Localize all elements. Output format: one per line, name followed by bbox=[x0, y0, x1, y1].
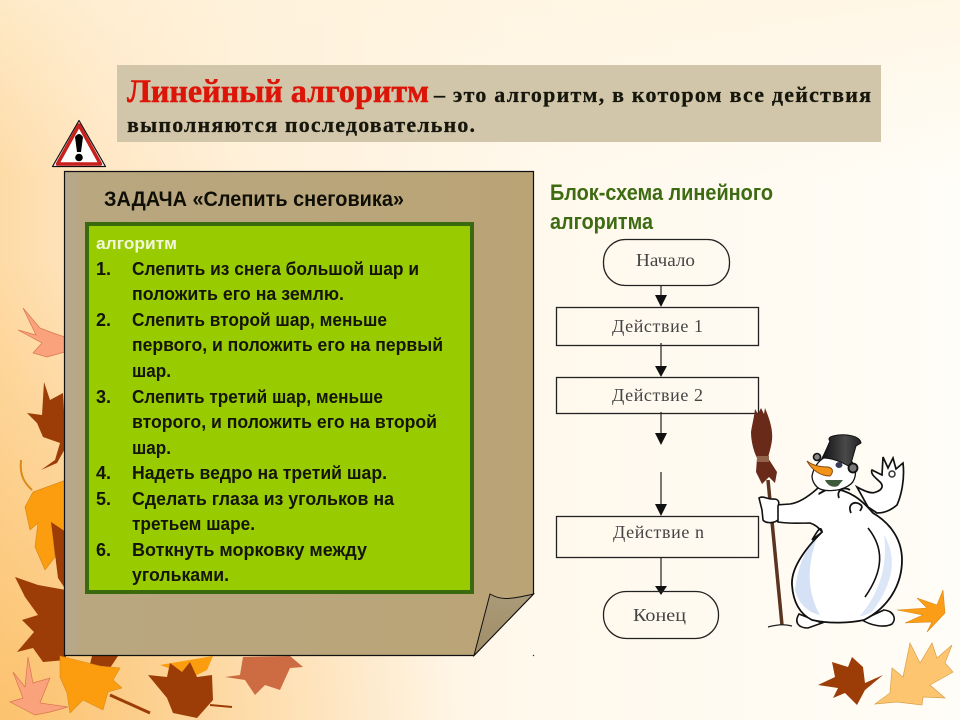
step 6: угольками. bbox=[132, 565, 229, 585]
step 1: Слепить из снега большой шар и bbox=[132, 259, 419, 279]
step 4: Надеть ведро на третий шар. bbox=[132, 463, 387, 483]
arrow: action n to end bbox=[655, 558, 667, 595]
algorithm label: алгоритм bbox=[96, 234, 177, 253]
body bbox=[792, 488, 902, 623]
step 6 bbox=[96, 540, 367, 585]
step 3 bbox=[96, 387, 437, 458]
ear bolt bbox=[848, 464, 858, 472]
flowchart heading: алгоритма bbox=[550, 209, 654, 234]
definition line two: выполняются последовательно. bbox=[127, 112, 475, 137]
illustration: snowman with broom bbox=[751, 408, 904, 628]
step 1 bbox=[96, 259, 419, 304]
step 5: третьем шаре. bbox=[132, 514, 255, 534]
feet bbox=[797, 614, 822, 628]
flowchart heading: Блок-схема линейного bbox=[550, 180, 773, 205]
step 2: первого, и положить его на первый bbox=[132, 335, 443, 355]
eye bolt bbox=[814, 454, 820, 460]
task heading: ЗАДАЧА «Слепить снеговика» bbox=[104, 188, 404, 211]
broom handle bbox=[768, 480, 782, 625]
step 1: 1. bbox=[96, 259, 111, 279]
step 2: Слепить второй шар, меньше bbox=[132, 310, 387, 330]
action 1 bbox=[556, 308, 758, 346]
step 3: шар. bbox=[132, 438, 171, 458]
left arm bbox=[776, 488, 822, 540]
end node bbox=[604, 592, 718, 638]
arrow: action 1 to action 2 bbox=[655, 343, 667, 377]
left hand bbox=[759, 497, 779, 523]
action 1: Действие 1 bbox=[612, 316, 703, 336]
flowchart bbox=[556, 240, 758, 638]
step 3: Слепить третий шар, меньше bbox=[132, 387, 383, 407]
step 6: 6. bbox=[96, 540, 111, 560]
step 5: 5. bbox=[96, 489, 111, 509]
action n: Действие n bbox=[613, 522, 704, 542]
action 2 bbox=[556, 378, 758, 414]
icon: warning triangle bbox=[52, 120, 106, 166]
eye bbox=[836, 462, 842, 468]
step 4: 4. bbox=[96, 463, 111, 483]
step 1: положить его на землю. bbox=[132, 284, 344, 304]
definition banner bbox=[117, 65, 881, 142]
arrow: action 2 down bbox=[655, 412, 667, 445]
panel: algorithm steps bbox=[87, 224, 472, 592]
start node bbox=[604, 240, 730, 286]
head bbox=[812, 455, 855, 491]
action n bbox=[556, 516, 758, 558]
mouth bbox=[825, 480, 843, 487]
step 3: второго, и положить его на второй bbox=[132, 412, 437, 432]
step 6: Воткнуть морковку между bbox=[132, 540, 367, 560]
page fold bbox=[474, 594, 534, 656]
stray dot near sheet corner bbox=[533, 655, 534, 656]
step 5 bbox=[96, 489, 395, 534]
body inner line bbox=[865, 528, 880, 597]
arrow: start to action 1 bbox=[655, 286, 667, 307]
step 2: 2. bbox=[96, 310, 111, 330]
hat bbox=[822, 435, 861, 467]
definition line one: – это алгоритм, в котором все действия bbox=[433, 82, 871, 107]
step 3: 3. bbox=[96, 387, 111, 407]
autumn leaves: bottom right bbox=[818, 590, 953, 705]
buttons bbox=[838, 488, 850, 498]
step 2 bbox=[96, 310, 443, 381]
start node: Начало bbox=[636, 250, 695, 270]
arrow: into action n bbox=[655, 472, 667, 516]
step 2: шар. bbox=[132, 361, 171, 381]
carrot nose bbox=[807, 461, 832, 476]
step 5: Сделать глаза из угольков на bbox=[132, 489, 395, 509]
right arm bbox=[857, 457, 904, 513]
action 2: Действие 2 bbox=[612, 385, 703, 405]
broom head bbox=[751, 408, 777, 484]
autumn leaves: left side and bottom bbox=[10, 308, 303, 718]
heading: linear algorithm: Линейный алгоритм bbox=[127, 74, 429, 110]
end node: Конец bbox=[633, 605, 686, 625]
panel: task sheet bbox=[64, 172, 534, 656]
